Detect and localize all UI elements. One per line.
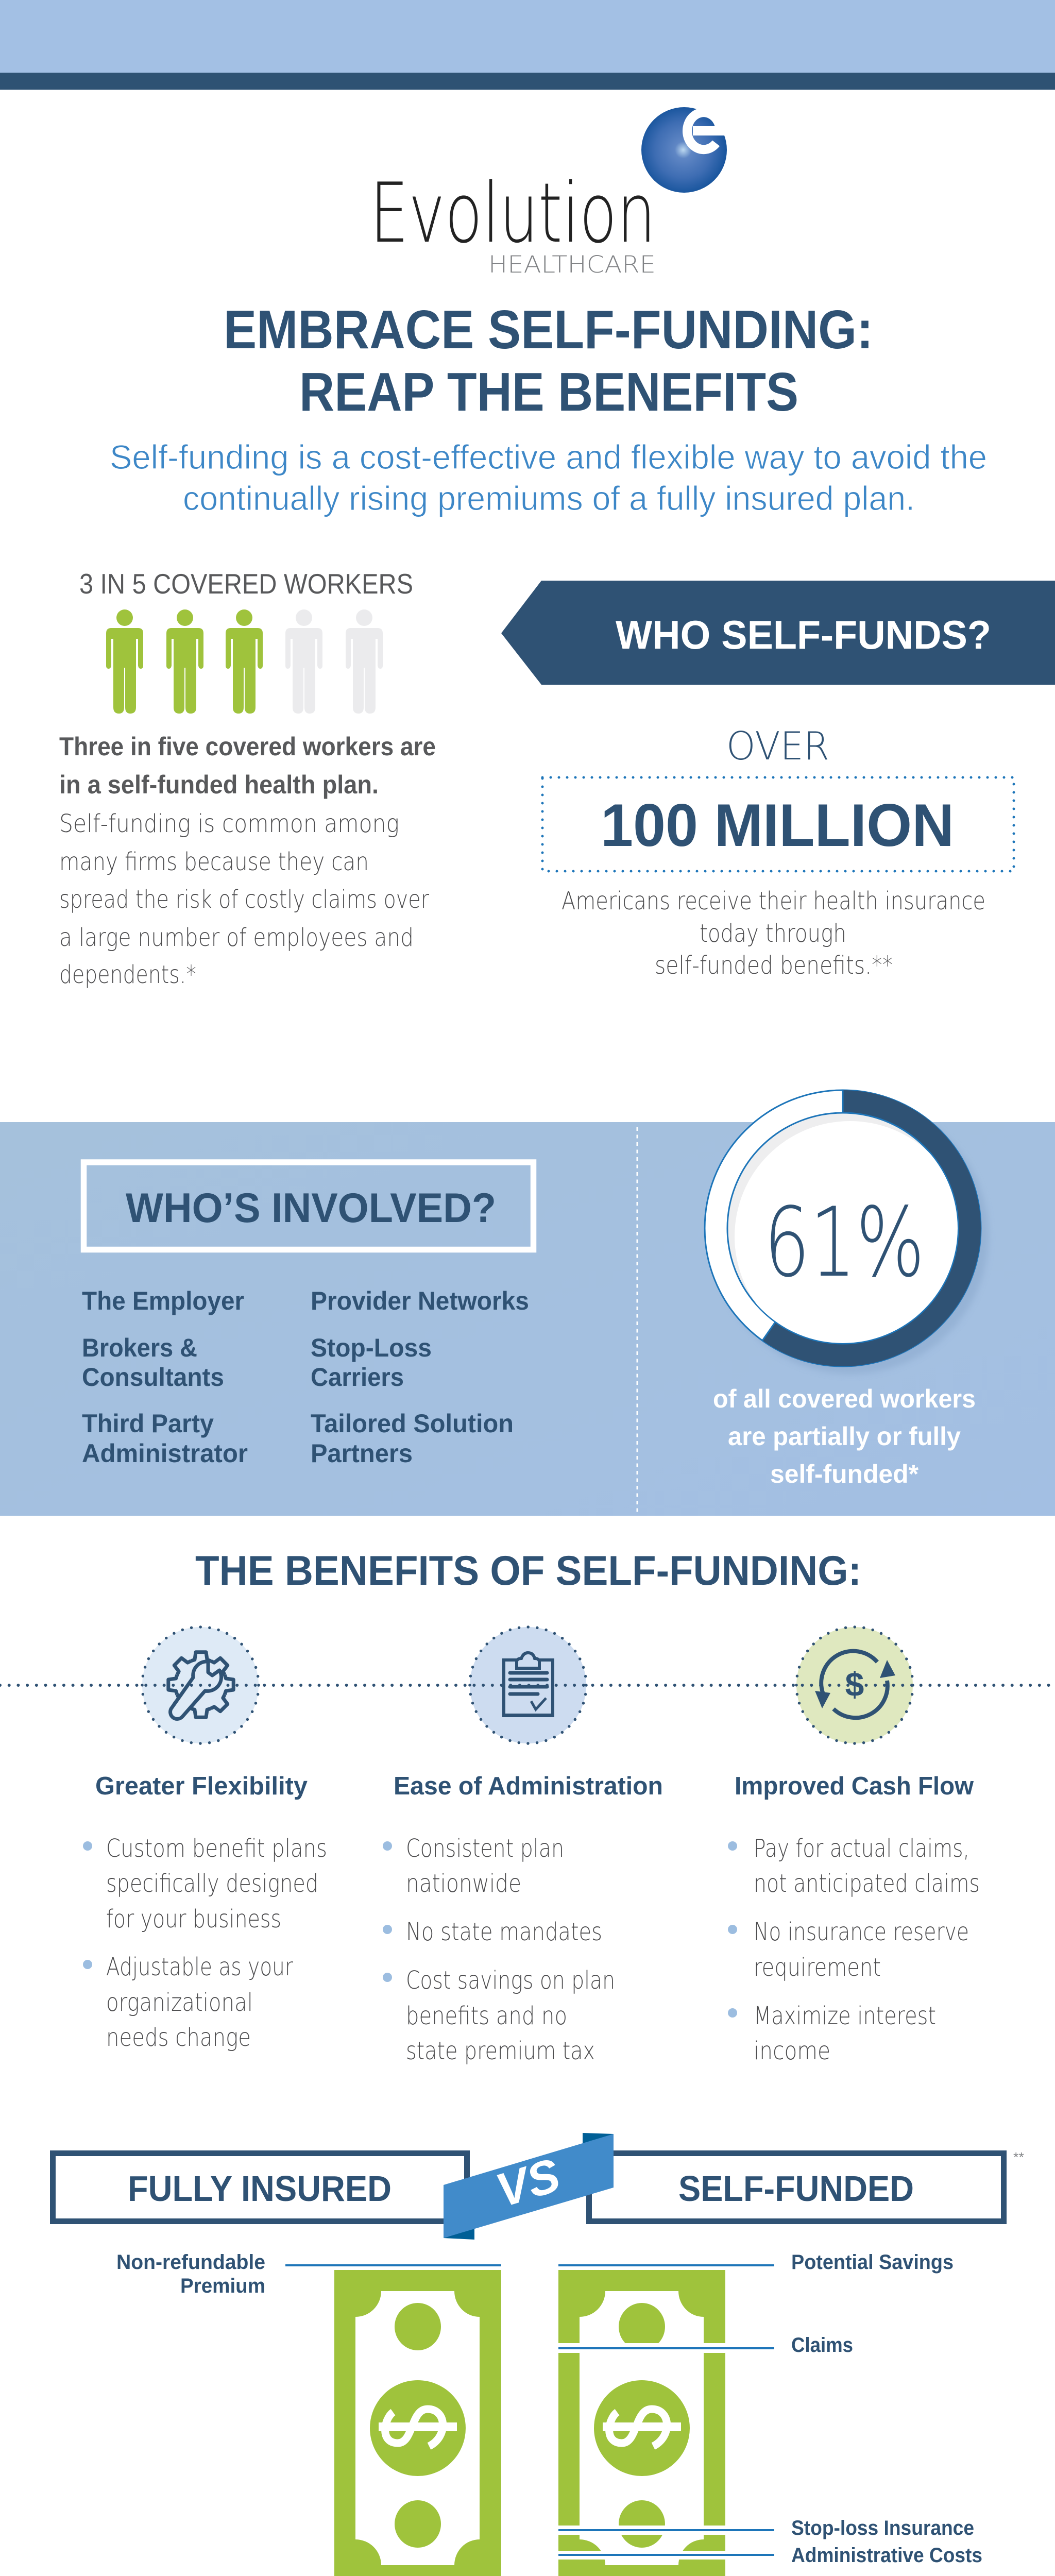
title [224,299,873,422]
column: improved cash flow: requirement [754,1953,881,1982]
panel: 3 in 5 covered workers [59,568,436,989]
logo: Evolution Healthcare [370,107,727,278]
callout labels: Administrative Costs [791,2544,982,2567]
heading box: self-funded: SELF-FUNDED [678,2168,914,2209]
column: improved cash flow: Maximize interest [754,2002,936,2030]
list: parties involved: Brokers & [82,1333,197,1362]
callout labels: Stop-loss Insurance [791,2517,974,2539]
heading box: self-funded: ** [1013,2149,1024,2165]
column: improved cash flow: income [754,2037,830,2065]
column: greater flexibility: Custom benefit plans [106,1834,327,1863]
callout labels: Non-refundable [116,2251,265,2274]
text block: three in five: Three in five covered workers are [59,732,436,761]
heading: 3 in 5 covered workers: 3 IN 5 COVERED WORKERS [79,568,413,600]
text block: three in five: Self-funding is common among [59,809,399,838]
chart: bill callout lines [285,2265,774,2555]
list: parties involved: Consultants [82,1363,224,1392]
header band [0,0,1055,90]
text block: three in five: many firms because they can [59,848,369,876]
list: parties involved: Third Party [82,1409,214,1438]
chart: fully insured bill [334,2270,501,2576]
panel: who's involved [0,1090,1055,1516]
chart: 61% donut [705,1090,989,1374]
callout labels: Potential Savings [791,2251,954,2274]
text block: americans: today through [700,919,846,948]
column: improved cash flow: No insurance reserve [754,1918,969,1946]
heading box: fully insured [53,2154,467,2222]
text block: of all covered workers: are partially or fully [728,1422,961,1451]
column: greater flexibility: for your business [106,1905,281,1934]
column: ease of administration [383,1772,663,2065]
column: ease of administration: benefits and no [406,2002,567,2030]
column: ease of administration: Ease of Administration [394,1772,663,1800]
logo: Evolution Healthcare: Evolution [370,165,656,261]
panel: fully insured vs self-funded [53,2133,1024,2576]
ribbon: vs: VS [490,2148,566,2217]
text block: americans: self-funded benefits.** [655,951,893,980]
icon: dollar cycle [796,1627,913,1743]
column: ease of administration: nationwide [406,1869,521,1898]
text block: three in five [59,732,436,989]
banner: who self-funds arrow: WHO SELF-FUNDS? [616,612,991,657]
text block: of all covered workers [713,1384,976,1488]
column: greater flexibility: needs change [106,2023,251,2052]
list: parties involved: Administrator [82,1439,248,1468]
callout labels: Claims [791,2334,853,2357]
title: REAP THE BENEFITS [299,362,798,422]
list: parties involved: Carriers [311,1363,404,1392]
callout labels: Premium [180,2275,265,2297]
list: parties involved: The Employer [82,1286,244,1315]
panel: who self-funds [501,581,1055,980]
text block: americans [561,887,985,980]
subtitle: continually rising premiums of a fully insured plan. [183,479,915,517]
column: improved cash flow: Improved Cash Flow [735,1772,974,1800]
heading: who's involved: WHO’S INVOLVED? [126,1185,496,1231]
heading box: fully insured: FULLY INSURED [128,2168,392,2209]
column: improved cash flow [728,1772,980,2065]
list: parties involved: Stop-Loss [311,1333,432,1362]
heading: who's involved [83,1162,534,1250]
ribbon: vs [444,2133,614,2240]
column: greater flexibility: Adjustable as your [106,1953,293,1981]
callout labels [116,2251,982,2567]
chart: self-funded bill [556,2270,727,2576]
panel: benefits of self-funding [0,1548,1055,2065]
text block: three in five: dependents.* [59,960,196,989]
column: greater flexibility: organizational [106,1988,253,2017]
text block: of all covered workers: self-funded* [770,1460,919,1488]
heading: benefits: THE BENEFITS OF SELF-FUNDING: [195,1548,861,1594]
column: ease of administration: No state mandates [406,1918,602,1946]
list: parties involved: Partners [311,1439,413,1468]
stat: over 100 million: 100 MILLION [601,791,954,859]
list: parties involved: Tailored Solution [311,1409,514,1438]
list: parties involved [82,1286,529,1468]
icon: five people, three highlighted [106,609,383,714]
subtitle [110,438,987,517]
title: EMBRACE SELF-FUNDING: [224,299,873,360]
icon: gear and wrench [142,1627,259,1743]
logo: Evolution Healthcare: HEALTHCARE [488,251,656,278]
column: ease of administration: Cost savings on plan [406,1966,615,1995]
column: greater flexibility [83,1772,327,2052]
banner: who self-funds arrow [501,581,1055,685]
subtitle: Self-funding is a cost-effective and flexible way to avoid the [110,438,987,476]
heading box: self-funded [589,2149,1024,2222]
text block: three in five: in a self-funded health plan. [59,770,379,799]
stat: over 100 million [542,723,1014,871]
chart: 61% donut: 61% [764,1187,925,1298]
column: greater flexibility: Greater Flexibility [95,1772,308,1800]
icon: dollar cycle: $ [845,1665,864,1703]
text block: of all covered workers: of all covered workers [713,1384,976,1413]
column: improved cash flow: not anticipated claims [754,1869,980,1898]
stat: over 100 million: OVER [726,723,829,769]
icon: clipboard [470,1627,586,1743]
column: greater flexibility: specifically designed [106,1869,318,1898]
column: improved cash flow: Pay for actual claims, [754,1834,969,1863]
list: parties involved: Provider Networks [311,1286,529,1315]
column: ease of administration: Consistent plan [406,1834,564,1863]
text block: three in five: a large number of employees and [59,923,414,952]
column: ease of administration: state premium tax [406,2037,595,2065]
text block: three in five: spread the risk of costly claims over [59,885,429,914]
